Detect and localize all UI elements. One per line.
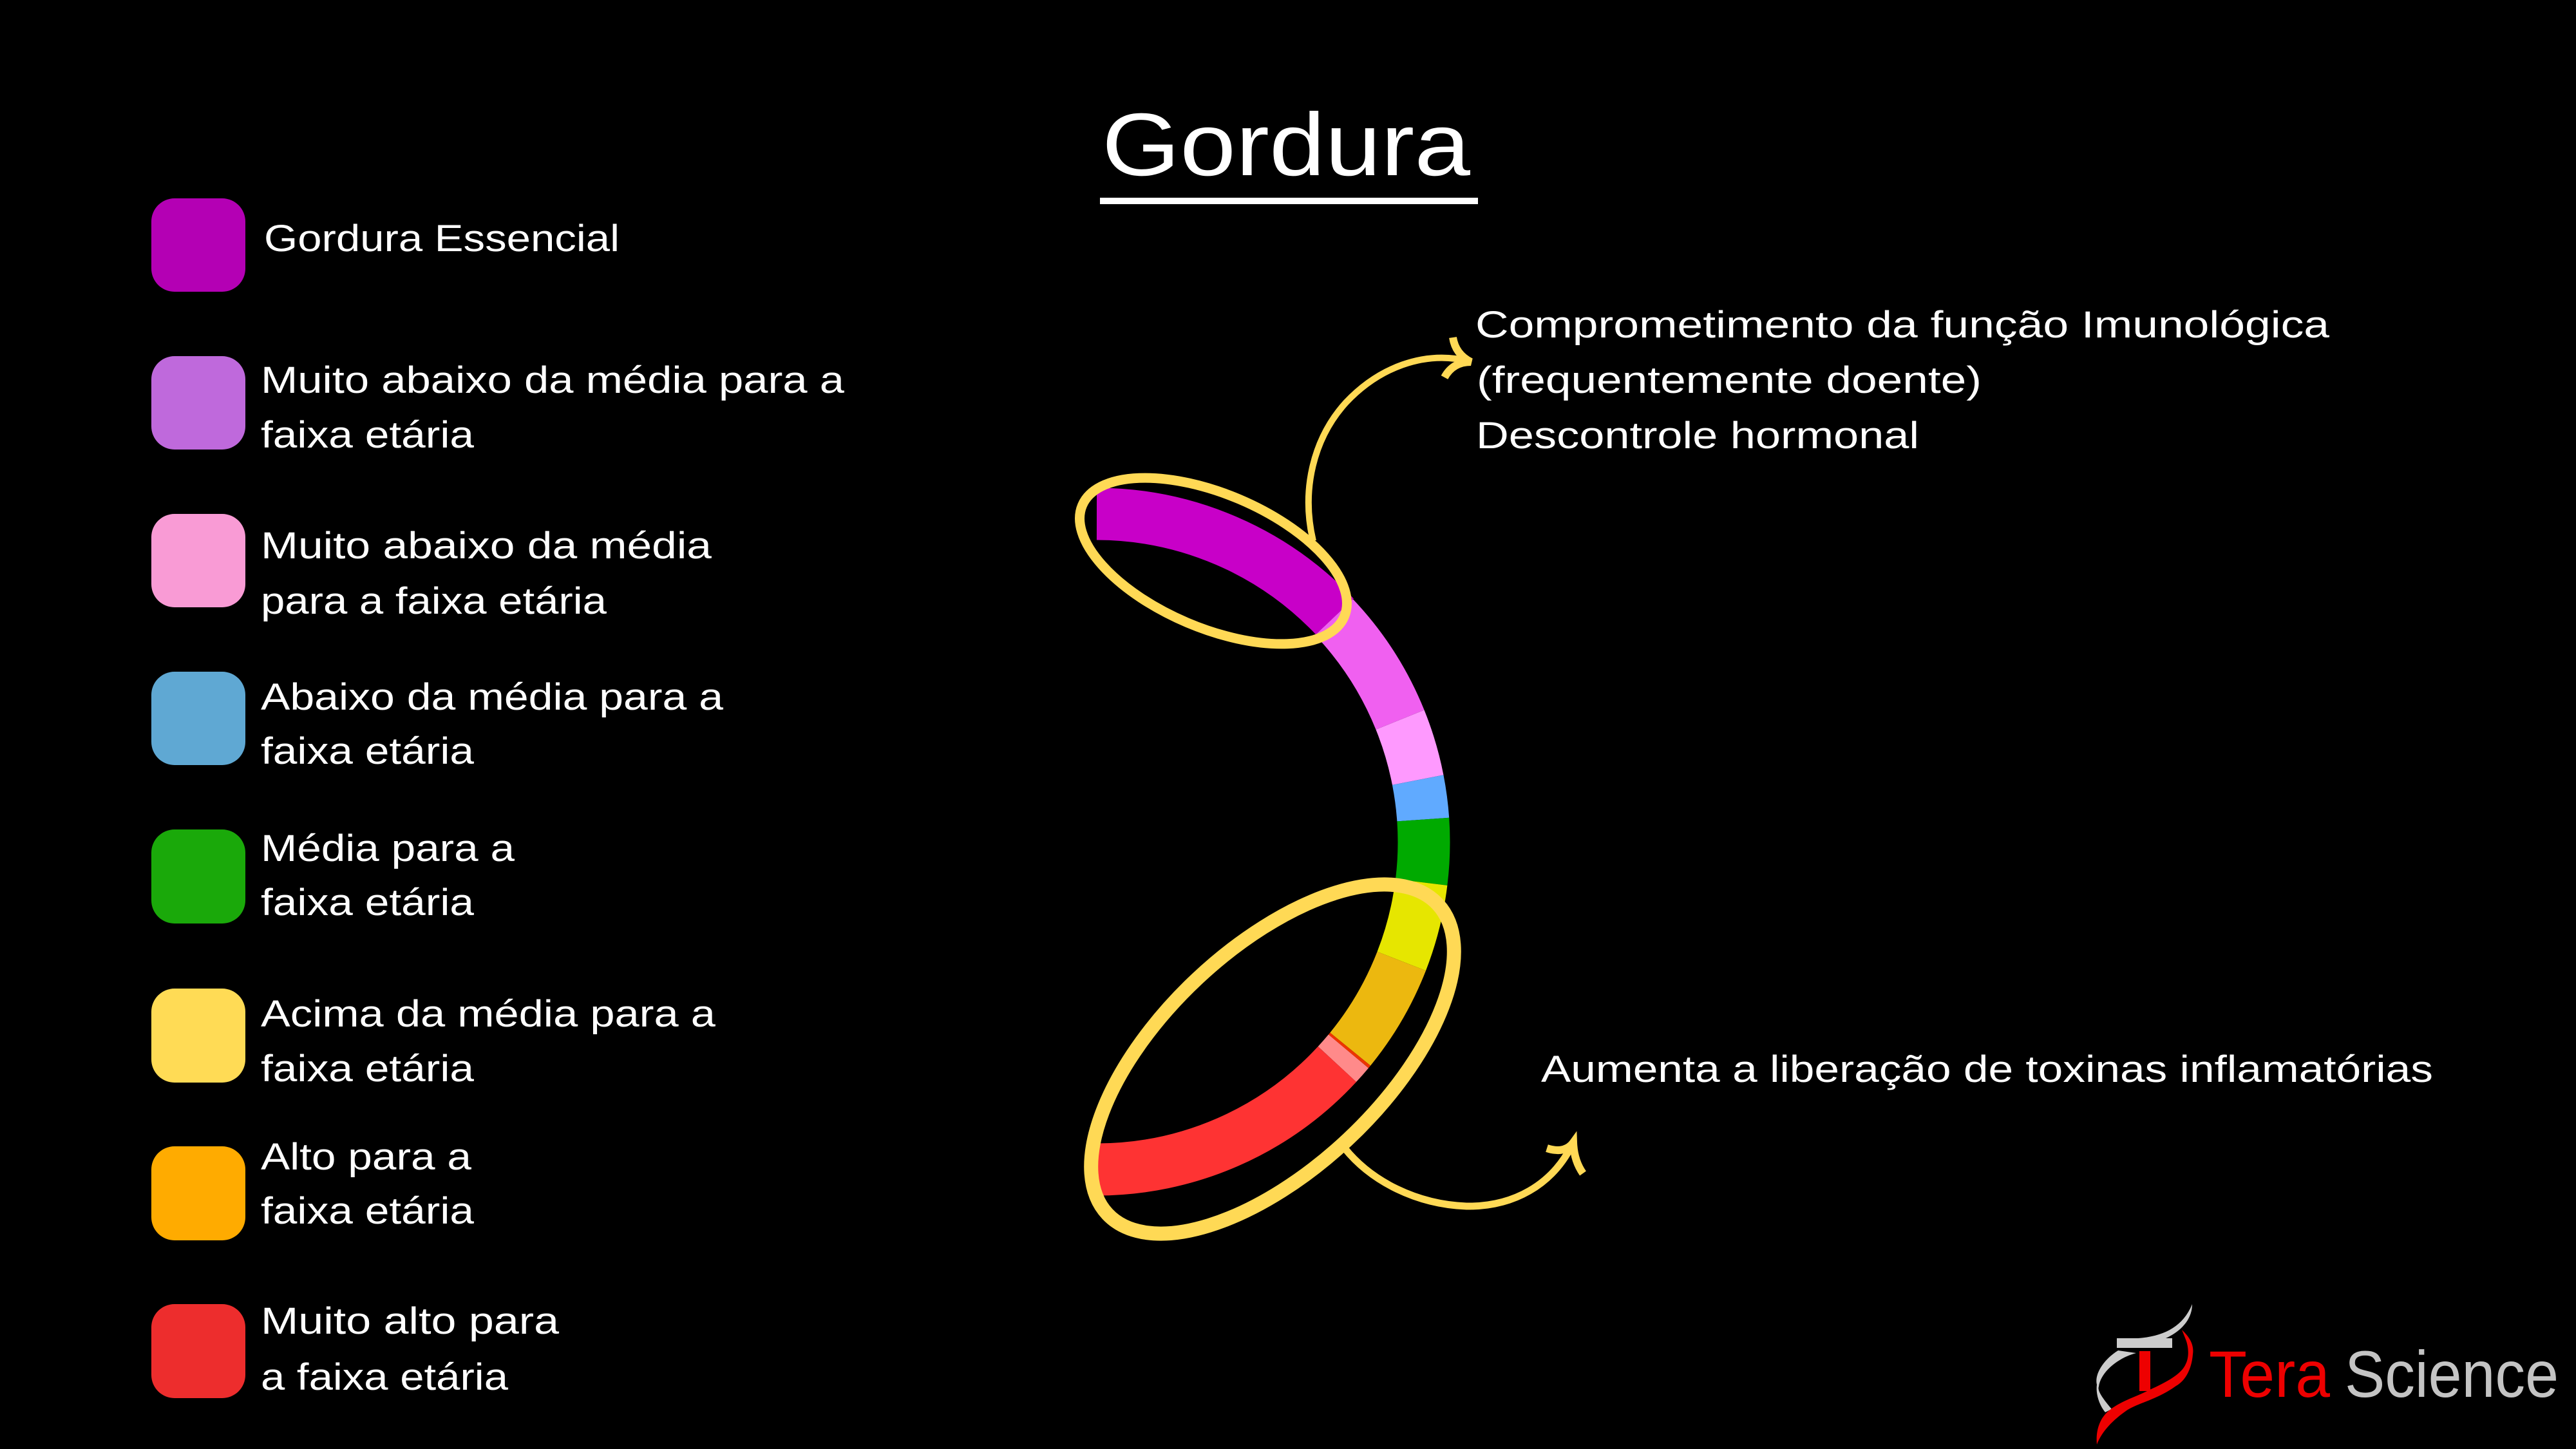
arc segment: blue [1418, 780, 1423, 820]
logo: Tera Science [2096, 1304, 2559, 1444]
legend item: muito abaixo da média para a faixa etária (rosa): para a faixa etária [261, 580, 607, 622]
legend item: alto: Alto para a [261, 1136, 472, 1178]
highlight ellipse: top [1056, 444, 1370, 678]
legend item: média: faixa etária [261, 882, 475, 923]
legend item: alto: faixa etária [261, 1190, 475, 1232]
logo: Tera Science: Tera [2209, 1338, 2330, 1411]
arc segment: pink [1334, 617, 1400, 720]
legend item: acima da média [151, 989, 716, 1090]
arrow: top [1309, 337, 1471, 541]
arc segment: orange [1350, 961, 1401, 1049]
arc segment: red [1097, 1064, 1337, 1170]
legend item: Gordura Essencial [151, 198, 620, 292]
legend item: abaixo da média [151, 672, 724, 772]
callout text: top: Comprometimento da função Imunológica [1475, 304, 2330, 346]
callout text: bottom: Aumenta a liberação de toxinas inflamatórias [1541, 1048, 2433, 1090]
title: Gordura [1102, 95, 1470, 194]
legend item: acima da média: faixa etária [261, 1048, 475, 1090]
legend item: muito abaixo da média para a faixa etária (rosa): Muito abaixo da média [261, 525, 712, 567]
legend [151, 198, 845, 1398]
highlight ellipse: bottom [1032, 824, 1513, 1294]
arrow: bottom [1345, 1142, 1583, 1206]
arc segment: marker stripe [1337, 1051, 1349, 1064]
legend item: abaixo da média: faixa etária [261, 730, 475, 772]
legend item: média [151, 828, 515, 923]
legend item: muito abaixo da média para a faixa etária (rosa) [151, 514, 712, 622]
legend item: muito abaixo da média para a faixa etária (roxo) [151, 356, 845, 456]
callout text: top: Descontrole hormonal [1476, 415, 1919, 457]
legend item: muito alto [151, 1300, 560, 1398]
legend item: média: Média para a [261, 828, 515, 869]
legend item: muito alto: Muito alto para [261, 1300, 560, 1342]
legend item: muito alto: a faixa etária [261, 1356, 509, 1398]
arc segment: magenta [1097, 514, 1334, 616]
legend item: muito abaixo da média para a faixa etária (roxo): Muito abaixo da média para a [261, 359, 845, 401]
legend item: muito abaixo da média para a faixa etária (roxo): faixa etária [261, 414, 475, 456]
logo icon [2096, 1304, 2193, 1444]
arc segment: yellow [1401, 882, 1421, 961]
arc segment: green [1421, 820, 1424, 882]
legend item: acima da média: Acima da média para a [261, 993, 716, 1035]
legend item: Gordura Essencial: Gordura Essencial [264, 218, 620, 260]
arc segment: red divider line [1349, 1049, 1350, 1051]
legend item: alto [151, 1136, 475, 1240]
callout text: top: (frequentemente doente) [1477, 359, 1982, 401]
legend item: abaixo da média: Abaixo da média para a [261, 676, 724, 718]
ring chart: body fat arc [1097, 514, 1424, 1170]
callout text: top [1475, 304, 2330, 457]
arc segment: light pink [1400, 720, 1418, 780]
logo: Tera Science: Science [2345, 1338, 2559, 1411]
